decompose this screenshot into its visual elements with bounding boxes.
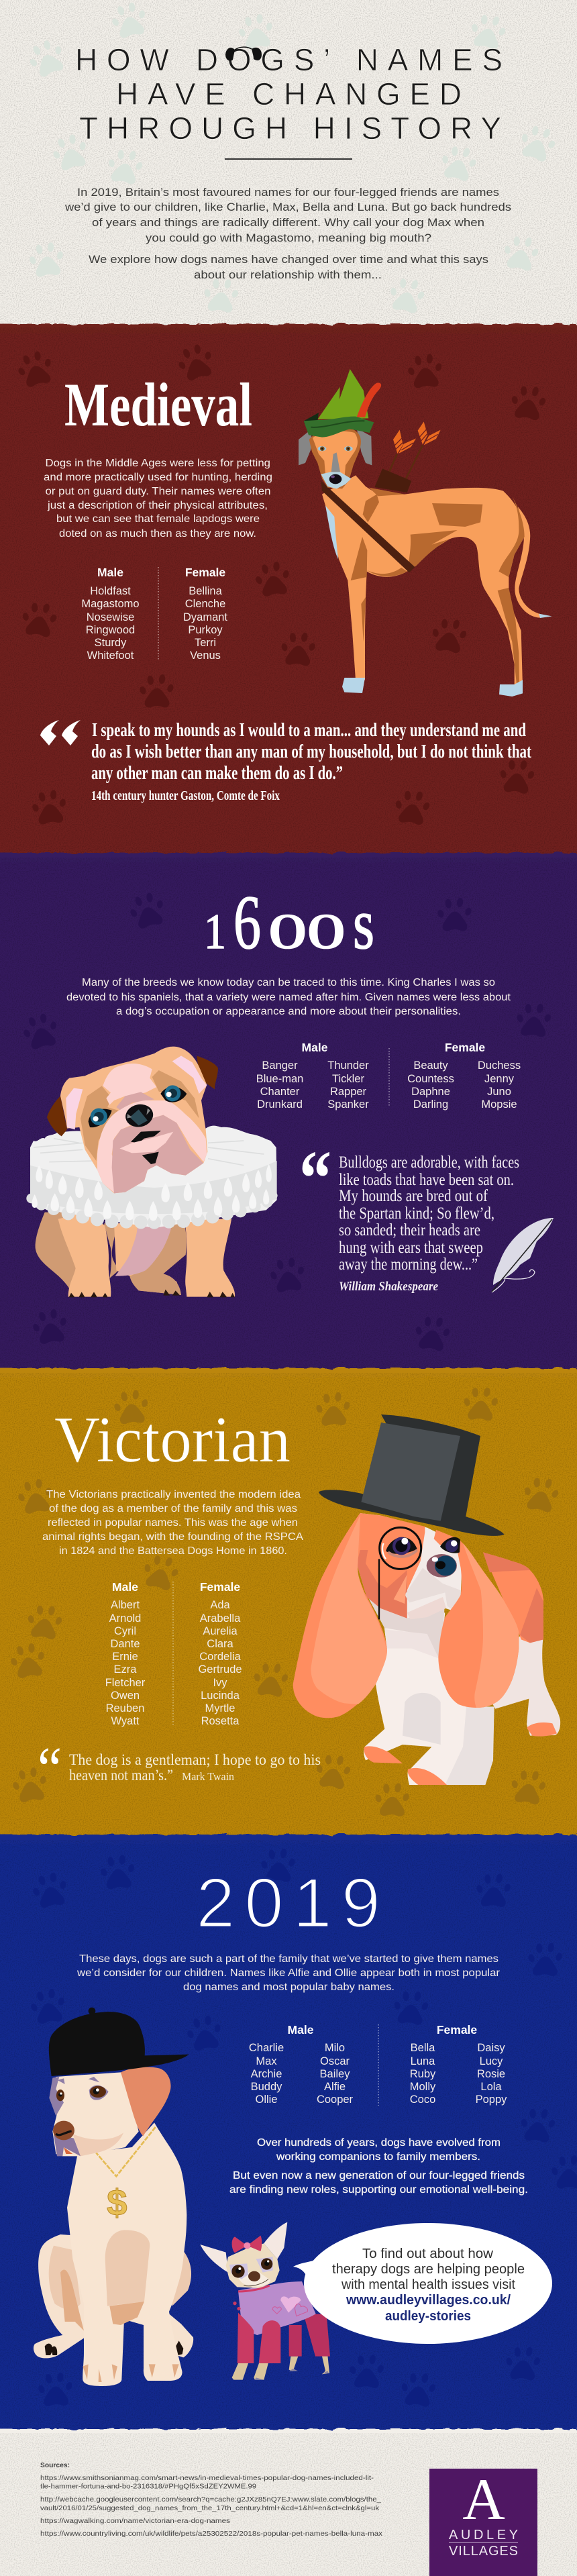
medieval names list: Terri <box>195 637 216 649</box>
1600s names list: Duchess <box>478 1060 521 1072</box>
2019 names list: Ruby <box>410 2068 436 2080</box>
speech bubble callout: therapy dogs are helping people <box>332 2262 525 2277</box>
victorian names list: Arabella <box>200 1612 241 1625</box>
icon: dog ears on the letter O <box>225 47 262 61</box>
top hat <box>319 1414 505 1536</box>
2019 names list: Female <box>437 2023 477 2037</box>
intro text: you could go with Magastomo, meaning big mouth? <box>146 231 431 244</box>
2019 names list: Milo <box>325 2042 345 2054</box>
intro text: In 2019, Britain’s most favoured names for our four-legged friends are names <box>77 186 499 199</box>
hound tail <box>515 507 540 618</box>
1600s names list: Spanker <box>327 1098 369 1111</box>
speech bubble callout: www.audleyvillages.co.uk/ <box>346 2293 511 2308</box>
bulldog head <box>60 1047 207 1193</box>
closing text <box>229 2137 528 2196</box>
2019 body text: These days, dogs are such a part of the family that we’ve started to give them names <box>79 1953 499 1965</box>
bulldog eyes <box>89 1085 187 1127</box>
hound head <box>309 429 361 488</box>
victorian names list <box>105 1580 242 1727</box>
title: THROUGH HISTORY <box>79 111 501 146</box>
medieval names list: Male <box>97 566 123 579</box>
medieval names list: Ringwood <box>86 624 135 636</box>
1600s names list: Daphne <box>411 1086 450 1098</box>
2019 names list: Bailey <box>320 2068 350 2080</box>
heading: 1600s: 1 <box>204 905 226 960</box>
paw print background pattern <box>19 890 553 1352</box>
2019 names list: Poppy <box>476 2094 507 2106</box>
sources list: https://www.countryliving.com/uk/wildlife/pets/a25302522/2018s-popular-pet-names-bella-luna-max <box>40 2530 383 2538</box>
2019 names list: Alfie <box>324 2081 346 2093</box>
medieval body text: Dogs in the Middle Ages were less for petting <box>46 458 270 469</box>
intro text: about our relationship with them... <box>194 268 382 281</box>
2019 names list: Rosie <box>477 2068 505 2080</box>
illustration: greyhound with archer hat <box>299 369 552 697</box>
1600s names list: Banger <box>262 1060 298 1072</box>
labrador eyes and nose <box>53 2077 109 2140</box>
sources list: http://webcache.googleusercontent.com/search?q=cache:g2JXz85nQ7EJ:www.slate.com/blogs/the_ <box>40 2495 381 2504</box>
medieval body text: just a description of their physical attributes, <box>47 500 268 511</box>
sources list <box>40 2461 383 2538</box>
closing text: But even now a new generation of our four-legged friends <box>233 2170 525 2181</box>
medieval names list: Sturdy <box>95 637 127 649</box>
hound body <box>322 475 525 686</box>
victorian names list: Ezra <box>114 1663 137 1676</box>
heading: Medieval: Medieval <box>64 370 252 439</box>
icon: quill feather <box>492 1218 554 1292</box>
hound ears <box>299 428 372 465</box>
victorian names list: Lucinda <box>201 1690 240 1702</box>
panel: victorian <box>0 1368 577 1841</box>
2019 body text: dog names and most popular baby names. <box>183 1981 395 1993</box>
panel: footer sources and logo <box>0 2429 577 2576</box>
victorian names list: Albert <box>111 1599 140 1611</box>
labrador haunches <box>34 2234 193 2358</box>
intro text: We explore how dogs names have changed over time and what this says <box>89 253 488 266</box>
chihuahua jumper <box>238 2281 316 2335</box>
medieval names list: Venus <box>190 650 221 662</box>
2019 names list: Max <box>256 2055 277 2067</box>
1600s names list: Rapper <box>330 1086 367 1098</box>
archer hat and feather <box>304 369 381 437</box>
panel: 2019 <box>0 1835 577 2434</box>
heading: 1600s: s <box>353 884 374 964</box>
2019 names list: Bella <box>411 2042 435 2054</box>
hound strap <box>321 481 415 572</box>
2019 names list: Coco <box>410 2094 435 2106</box>
1600s names list: Male <box>302 1041 328 1054</box>
chihuahua hearts <box>272 2296 308 2316</box>
victorian body text: in 1824 and the Battersea Dogs Home in 1860. <box>59 1545 287 1557</box>
2019 body text: we’d consider for our children. Names like Alfie and Ollie appear both in most popular <box>76 1967 500 1979</box>
illustration: chihuahua in pink jumper <box>200 2222 330 2380</box>
intro text <box>64 186 511 281</box>
basset rear leg and back <box>478 1552 560 1737</box>
1600s body text: a dog’s occupation or appearance and more about their personalities. <box>116 1006 461 1017</box>
mark twain quote: Mark Twain <box>182 1770 234 1783</box>
victorian names list: Aurelia <box>203 1625 238 1637</box>
medieval body text: or put on guard duty. Their names were often <box>46 486 271 497</box>
medieval names list: Bellina <box>189 585 223 597</box>
basset eyes nose and monocle <box>379 1527 460 1619</box>
victorian body text: reflected in popular names. This was the age when <box>48 1517 298 1529</box>
heading: 1600s <box>204 880 374 965</box>
victorian names list: Arnold <box>109 1612 141 1625</box>
2019 names list: Daisy <box>477 2042 505 2054</box>
heading: Victorian: Victorian <box>54 1404 291 1476</box>
bulldog nose and mouth <box>119 1102 173 1164</box>
2019 names list: Cooper <box>317 2094 354 2106</box>
1600s names list: Chanter <box>260 1086 300 1098</box>
1600s body text: devoted to his spaniels, that a variety were named after him. Given names were less about <box>66 992 511 1003</box>
2019 names list: Ollie <box>255 2094 278 2106</box>
victorian names list: Gertrude <box>198 1663 242 1676</box>
victorian names list: Fletcher <box>105 1677 146 1689</box>
1600s names list: Blue-man <box>256 1073 303 1085</box>
speech bubble callout: with mental health issues visit <box>341 2277 515 2292</box>
closing text: working companions to family members. <box>276 2151 480 2163</box>
mark twain quote: The dog is a gentleman; I hope to go to his <box>69 1751 321 1768</box>
quote mark: “ <box>299 1134 331 1222</box>
2019 names list: Oscar <box>320 2055 350 2067</box>
victorian names list: Ivy <box>213 1677 227 1689</box>
victorian names list: Rosetta <box>201 1715 240 1727</box>
chihuahua eyes and nose <box>231 2258 272 2310</box>
2019 names list: Lucy <box>480 2055 503 2067</box>
intro text: we’d give to our children, like Charlie, Max, Bella and Luna. But go back hundreds <box>64 201 511 213</box>
paw print background pattern <box>23 0 560 315</box>
medieval names list <box>81 566 227 662</box>
victorian names list: Cordelia <box>199 1651 242 1663</box>
shakespeare quote <box>339 1153 519 1294</box>
shakespeare quote: hung with ears that sweep <box>339 1239 483 1257</box>
victorian names list: Dante <box>110 1638 140 1650</box>
logo: Audley Villages: AUDLEY <box>449 2528 518 2542</box>
closing text: Over hundreds of years, dogs have evolved from <box>257 2137 501 2149</box>
paw print background pattern <box>13 341 548 826</box>
2019 body text <box>76 1953 500 1993</box>
medieval quote: any other man can make them do as I do.” <box>91 763 343 784</box>
panel: medieval <box>0 324 577 863</box>
chihuahua head <box>226 2243 280 2288</box>
chihuahua legs <box>232 2314 330 2380</box>
labrador gold chain and pendant: $ <box>107 2182 127 2224</box>
medieval quote: 14th century hunter Gaston, Comte de Foix <box>91 788 280 803</box>
shakespeare quote: so sanded; their heads are <box>339 1221 480 1239</box>
1600s names list: Jenny <box>484 1073 515 1085</box>
medieval names list: Magastomo <box>81 598 140 610</box>
1600s names list: Tickler <box>332 1073 364 1085</box>
1600s names list: Female <box>445 1041 485 1054</box>
heading: 1600s: 00 <box>268 905 346 960</box>
1600s names list: Drunkard <box>257 1098 303 1111</box>
1600s names list: Juno <box>487 1086 511 1098</box>
medieval body text: doted on as much then as they are now. <box>59 528 256 539</box>
medieval names list: Dyamant <box>183 611 227 623</box>
chihuahua sleeves <box>238 2313 280 2363</box>
1600s names list: Beauty <box>413 1060 448 1072</box>
labrador head <box>49 2072 139 2156</box>
shakespeare quote: the Spartan kind; So flew’d, <box>339 1204 494 1223</box>
sources list: vault/2016/01/25/suggested_dog_names_from_the_17th_century.html+&cd=1&hl=en&ct=clnk&gl=uk <box>40 2504 380 2512</box>
victorian body text: The Victorians practically invented the modern idea <box>46 1489 301 1500</box>
hound front foot and hind foot <box>342 678 365 693</box>
medieval names list: Purkoy <box>188 624 223 636</box>
victorian names list: Male <box>112 1580 138 1594</box>
victorian names list: Ada <box>210 1599 231 1611</box>
medieval body text <box>44 458 272 539</box>
victorian names list: Ernie <box>112 1651 138 1663</box>
panel: header introduction <box>0 0 577 336</box>
shakespeare quote: Bulldogs are adorable, with faces <box>339 1153 519 1172</box>
1600s names list: Mopsie <box>481 1098 517 1111</box>
shakespeare quote: away the morning dew...” <box>339 1255 478 1274</box>
2019 names list: Molly <box>410 2081 436 2093</box>
2019 names list: Charlie <box>249 2042 284 2054</box>
1600s body text <box>66 977 511 1017</box>
medieval names list: Whitefoot <box>87 650 134 662</box>
shakespeare quote: like toads that have been sat on. <box>339 1171 514 1189</box>
2019 names list <box>249 2023 507 2106</box>
speech bubble callout: To find out about how <box>362 2247 494 2261</box>
shakespeare quote: William Shakespeare <box>339 1280 438 1294</box>
basset legs and body <box>364 1612 494 1785</box>
medieval quote <box>91 720 532 803</box>
panel: 1600s <box>0 853 577 1379</box>
chihuahua bow <box>232 2236 262 2253</box>
medieval names list: Nosewise <box>87 611 134 623</box>
victorian names list: Owen <box>111 1690 140 1702</box>
heading: 1600s: 6 <box>233 880 261 965</box>
1600s names list <box>256 1041 521 1111</box>
illustration: bulldog in ruff <box>26 1047 278 1297</box>
sources list: https://wagwalking.com/name/victorian-era-dog-names <box>40 2517 230 2525</box>
quote mark: “ <box>38 1735 62 1803</box>
hound shading <box>351 488 525 684</box>
baseball cap <box>49 2008 189 2076</box>
basset neck <box>369 1599 445 1657</box>
1600s names list: Darling <box>413 1098 448 1111</box>
2019 names list: Male <box>288 2023 314 2037</box>
ruff collar <box>26 1126 278 1229</box>
medieval names list: Female <box>185 566 225 579</box>
bulldog legs <box>36 1213 235 1297</box>
victorian body text <box>42 1489 304 1557</box>
medieval body text: and more practically used for hunting, herding <box>44 472 272 483</box>
victorian body text: animal rights began, with the founding of the RSPCA <box>42 1531 304 1543</box>
2019 names list: Luna <box>411 2055 435 2067</box>
speech bubble callout <box>293 2223 552 2344</box>
basset face <box>357 1513 463 1619</box>
paw print background pattern <box>8 1386 562 1816</box>
bulldog ears <box>47 1055 218 1136</box>
1600s names list: Countess <box>407 1073 454 1085</box>
logo: Audley Villages <box>429 2467 537 2576</box>
title: HOW DOGS’ NAMES <box>75 42 503 77</box>
intro text: of years and things are radically different. Why call your dog Max when <box>92 216 484 229</box>
victorian body text: of the dog as a member of the family and this was <box>49 1503 297 1514</box>
victorian names list: Wyatt <box>111 1715 140 1727</box>
2019 names list: Buddy <box>251 2081 282 2093</box>
chihuahua ears <box>200 2222 287 2273</box>
victorian names list: Reuben <box>106 1702 144 1714</box>
sources list: https://www.smithsonianmag.com/smart-news/in-medieval-times-popular-dog-names-included-lit- <box>40 2474 374 2482</box>
divider <box>225 158 352 160</box>
victorian names list: Female <box>200 1580 240 1594</box>
logo: Audley Villages: A <box>462 2467 505 2532</box>
illustration: basset hound in top hat <box>293 1414 560 1785</box>
title: HAVE CHANGED <box>116 76 462 111</box>
medieval body text: but we can see that female lapdogs were <box>56 513 260 525</box>
labrador ear <box>121 2067 171 2136</box>
sources list: tle-hammer-fortuna-and-bo-2316318/#PHgQf5xSdZEY2WME.99 <box>40 2483 256 2491</box>
sources list: Sources: <box>40 2461 70 2469</box>
title <box>75 42 503 146</box>
1600s body text: Many of the breeds we know today can be traced to this time. King Charles I was so <box>82 977 495 988</box>
medieval names list: Clenche <box>185 598 225 610</box>
quote mark <box>40 720 81 745</box>
heading: 2019: 2019 <box>196 1864 380 1943</box>
shakespeare quote: My hounds are bred out of <box>339 1187 488 1205</box>
2019 names list: Lola <box>480 2081 502 2093</box>
speech bubble callout: audley-stories <box>385 2309 471 2324</box>
victorian names list: Myrtle <box>205 1702 235 1714</box>
victorian names list: Cyril <box>114 1625 136 1637</box>
illustration: labrador with cap and chain <box>34 2008 193 2386</box>
victorian names list: Clara <box>207 1638 234 1650</box>
basset ears <box>293 1513 519 1718</box>
closing text: are finding new roles, supporting our emotional well-being. <box>229 2184 528 2196</box>
medieval names list: Holdfast <box>90 585 131 597</box>
paw print background pattern <box>28 1849 577 2408</box>
logo: Audley Villages: VILLAGES <box>449 2544 518 2559</box>
2019 names list: Archie <box>251 2068 282 2080</box>
1600s names list: Thunder <box>327 1060 369 1072</box>
labrador thigh patch <box>83 2230 179 2382</box>
mark twain quote: heaven not man’s.” <box>69 1767 173 1784</box>
labrador body and front legs <box>67 2122 187 2386</box>
quiver and arrows <box>374 421 441 493</box>
labrador gold chain and pendant <box>96 2127 156 2224</box>
mark twain quote <box>69 1751 321 1784</box>
